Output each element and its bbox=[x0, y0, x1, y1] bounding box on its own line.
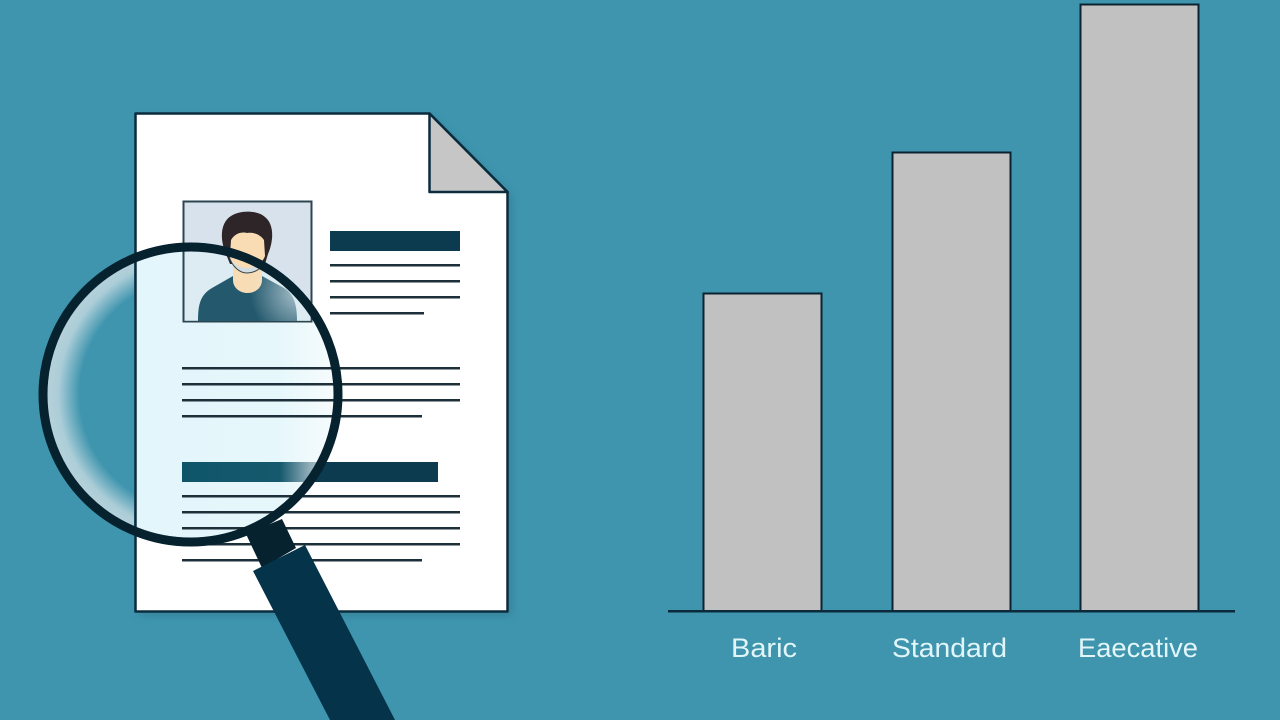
photo frame bbox=[184, 202, 312, 322]
document sheet bbox=[136, 114, 512, 616]
panel: resume document bbox=[136, 114, 512, 616]
label: Standard: Standard bbox=[892, 633, 1007, 663]
photo tint under lens bbox=[184, 252, 310, 321]
bar chart: tiers bbox=[668, 4, 1235, 663]
text lines: lower bbox=[182, 495, 460, 562]
icon: magnifying glass bbox=[30, 240, 395, 720]
beard bbox=[229, 256, 262, 273]
heading bar: top bbox=[330, 231, 460, 251]
text lines: top bbox=[330, 264, 460, 314]
text lines: middle bbox=[182, 367, 460, 418]
lens interior details bbox=[48, 263, 316, 526]
handle grip bbox=[253, 545, 395, 720]
face bbox=[230, 233, 265, 268]
bar: Standard bbox=[892, 152, 1010, 611]
folded corner bbox=[430, 114, 508, 192]
lens tint on paper bbox=[137, 252, 334, 538]
handle neck bbox=[246, 519, 296, 568]
chart baseline bbox=[668, 610, 1235, 612]
lens ring bbox=[43, 247, 338, 542]
bar: Basic bbox=[704, 294, 822, 611]
heading bar: lower bbox=[182, 462, 438, 482]
hair bbox=[222, 212, 272, 264]
bar: Executive bbox=[1080, 4, 1198, 611]
label: Executive: Eaecative bbox=[1078, 633, 1198, 663]
label: Basic: Baric bbox=[731, 633, 797, 663]
profile photo bbox=[184, 202, 312, 322]
neck bbox=[233, 262, 262, 293]
shirt bbox=[198, 276, 297, 321]
